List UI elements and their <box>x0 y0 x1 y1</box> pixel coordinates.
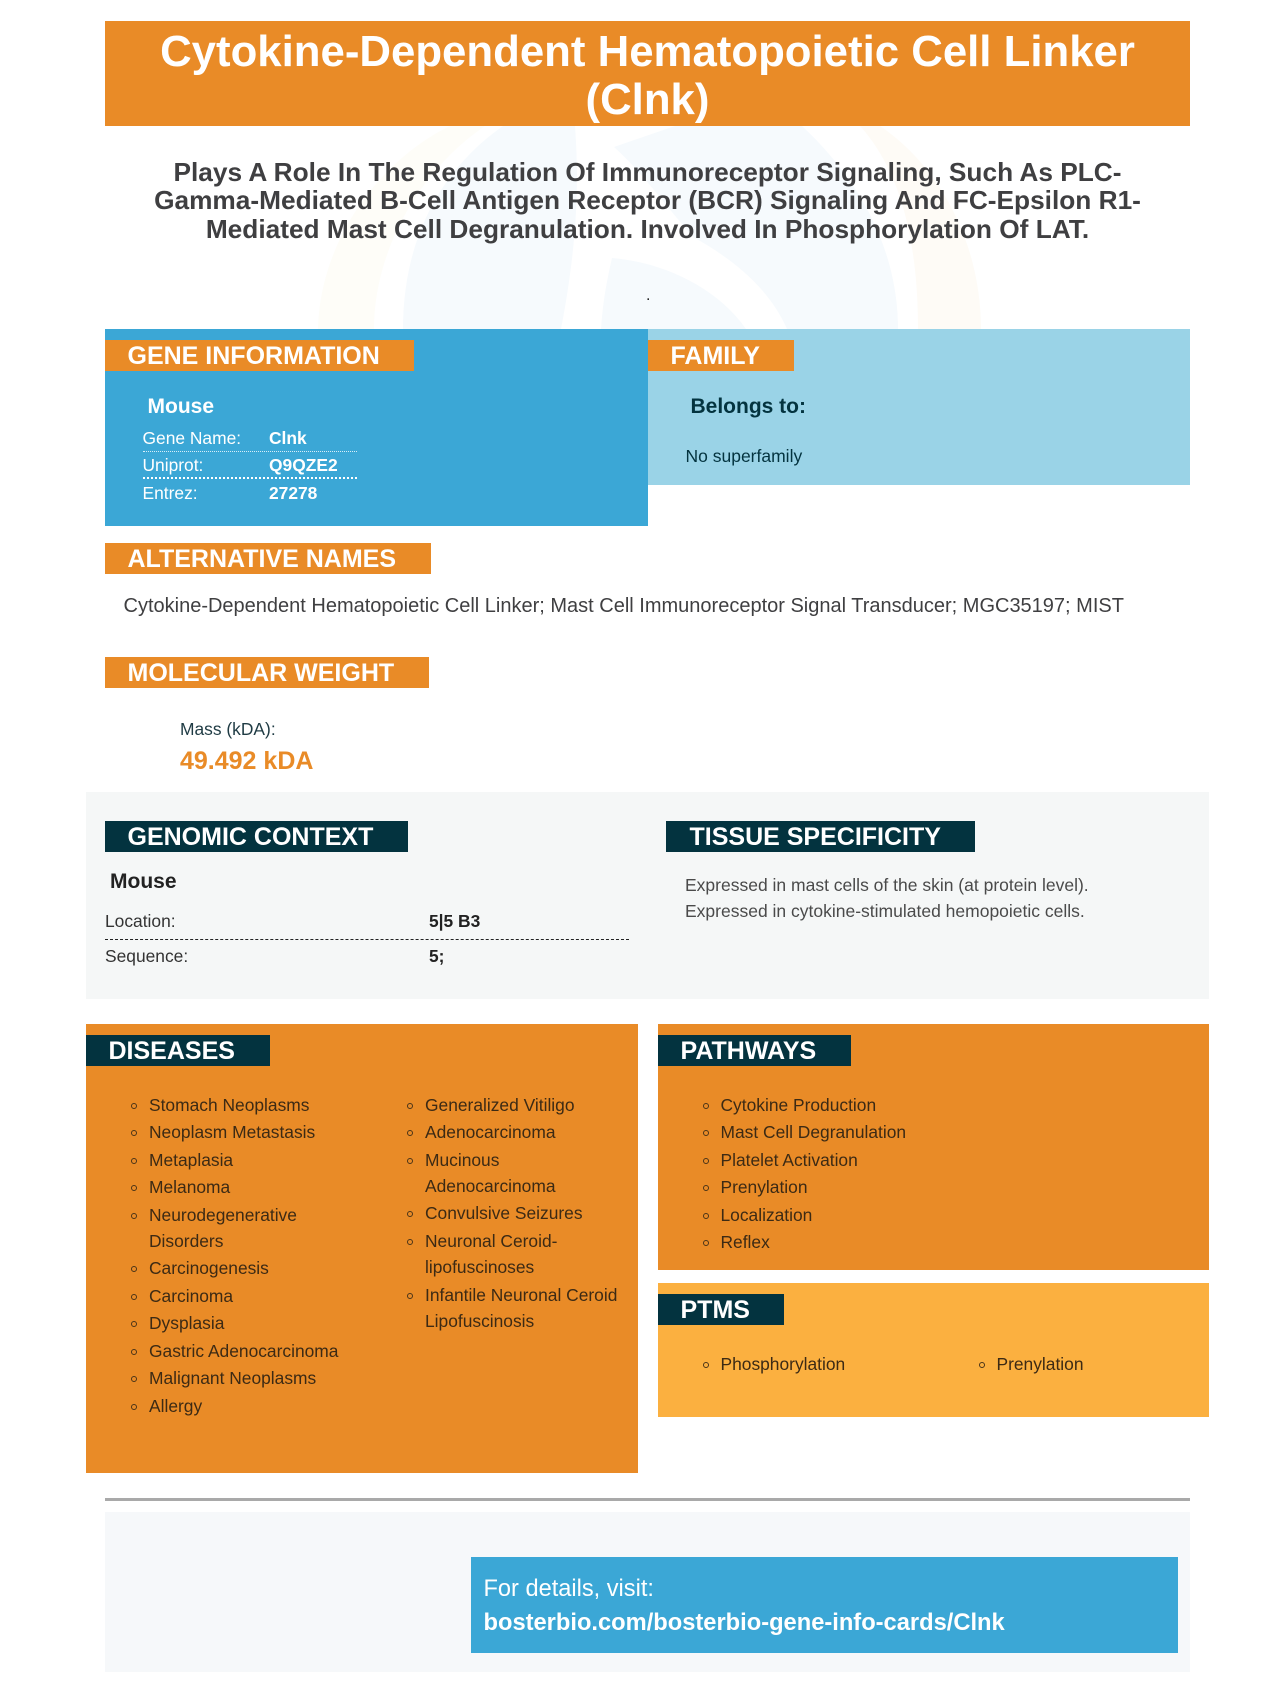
gene data table: 27278 <box>269 483 317 503</box>
ptm list <box>703 1354 1084 1374</box>
heading: family: FAMILY <box>670 342 760 370</box>
gene data table: Q9QZE2 <box>269 455 338 475</box>
disease list column two: Adenocarcinoma <box>425 1122 556 1142</box>
panel: footer <box>105 1512 1190 1672</box>
disease list column two: lipofuscinoses <box>425 1257 534 1277</box>
disease list column two: Mucinous <box>425 1150 499 1170</box>
pathway list: Mast Cell Degranulation <box>720 1122 906 1142</box>
genomic data table: Sequence: <box>105 946 188 966</box>
url: bosterbio.com/bosterbio-gene-info-cards/Clnk <box>484 1610 1005 1636</box>
gene data table: Uniprot: <box>142 455 203 475</box>
tissue specificity text <box>685 875 1089 921</box>
disease list column one <box>131 1095 338 1416</box>
disease list column one: Malignant Neoplasms <box>149 1368 316 1388</box>
panel: family <box>648 329 1190 485</box>
heading: pathways <box>658 1035 851 1066</box>
panel: pathways <box>658 1024 1209 1270</box>
disease list column two: Generalized Vitiligo <box>425 1095 575 1115</box>
disease list column two: Infantile Neuronal Ceroid <box>425 1285 617 1305</box>
panel: diseases <box>86 1024 638 1473</box>
title banner <box>105 21 1190 126</box>
genomic data table <box>105 911 629 966</box>
background watermark logo <box>403 126 981 329</box>
genomic data table: 5|5 B3 <box>429 911 480 931</box>
pathway list: Prenylation <box>720 1177 808 1197</box>
disease list column two: Convulsive Seizures <box>425 1203 583 1223</box>
title banner: (Clnk) <box>586 75 709 124</box>
subtitle description <box>154 156 1141 244</box>
disease list column two <box>407 1095 617 1331</box>
visit label: For details, visit: <box>484 1576 654 1602</box>
heading: tissue specificity: TISSUE SPECIFICITY <box>690 823 941 851</box>
heading: alternative names: ALTERNATIVE NAMES <box>128 545 396 573</box>
tissue specificity text: Expressed in mast cells of the skin (at protein level). <box>685 875 1089 895</box>
ptm list: Prenylation <box>996 1354 1084 1374</box>
disease list column two: Adenocarcinoma <box>425 1176 556 1196</box>
footer divider <box>105 1498 1190 1501</box>
disease list column one: Gastric Adenocarcinoma <box>149 1341 338 1361</box>
title banner: Cytokine-Dependent Hematopoietic Cell Linker <box>160 27 1135 76</box>
heading: molecular weight: MOLECULAR WEIGHT <box>128 659 394 687</box>
ptm list: Phosphorylation <box>720 1354 845 1374</box>
heading: gene information: GENE INFORMATION <box>128 342 380 370</box>
belongs to label: Belongs to: <box>690 395 806 418</box>
family value: No superfamily <box>686 446 802 466</box>
heading: diseases: DISEASES <box>108 1037 235 1065</box>
pathway list: Cytokine Production <box>720 1095 876 1115</box>
gene data table: Gene Name: <box>142 428 241 448</box>
disease list column one: Carcinogenesis <box>149 1258 269 1278</box>
disease list column one: Neurodegenerative <box>149 1205 297 1225</box>
disease list column one: Neoplasm Metastasis <box>149 1122 315 1142</box>
heading: pathways: PATHWAYS <box>680 1037 816 1065</box>
mass label: Mass (kDA): <box>180 719 276 739</box>
subtitle description: Gamma-Mediated B-Cell Antigen Receptor (BCR) Signaling And FC-Epsilon R1- <box>154 185 1141 215</box>
callout: details link <box>471 1557 1178 1653</box>
panel: ptms <box>658 1283 1209 1417</box>
genomic data table: 5; <box>429 946 444 966</box>
disease list column one: Allergy <box>149 1396 202 1416</box>
disease list column one: Dysplasia <box>149 1313 224 1333</box>
subtitle description: Mediated Mast Cell Degranulation. Involved In Phosphorylation Of LAT. <box>206 214 1089 244</box>
disease list column one: Disorders <box>149 1231 223 1251</box>
gene data table: Clnk <box>269 428 307 448</box>
genomic data table: Location: <box>105 911 176 931</box>
disease list column two: Neuronal Ceroid- <box>425 1231 557 1251</box>
mass value: 49.492 kDA <box>180 747 313 775</box>
heading: ptms: PTMS <box>680 1296 750 1324</box>
pathway list: Localization <box>720 1205 812 1225</box>
subtitle description: Plays A Role In The Regulation Of Immunoreceptor Signaling, Such As PLC- <box>173 156 1122 186</box>
heading: family <box>648 340 794 371</box>
disease list column one: Stomach Neoplasms <box>149 1095 309 1115</box>
disease list column one: Metaplasia <box>149 1150 233 1170</box>
species label: Mouse <box>148 395 214 418</box>
pathway list: Reflex <box>720 1232 770 1252</box>
panel: gene information <box>105 329 648 526</box>
species label: Mouse <box>110 870 177 893</box>
disease list column two: Lipofuscinosis <box>425 1311 534 1331</box>
alternative names text: Cytokine-Dependent Hematopoietic Cell Linker; Mast Cell Immunoreceptor Signal Transducer; MGC35197; MIST <box>124 595 1124 617</box>
small dot text: . <box>646 287 650 304</box>
gene data table: Entrez: <box>142 483 198 503</box>
heading: genomic context: GENOMIC CONTEXT <box>128 823 373 851</box>
disease list column one: Melanoma <box>149 1177 230 1197</box>
pathway list <box>703 1095 906 1252</box>
tissue specificity text: Expressed in cytokine-stimulated hemopoietic cells. <box>685 901 1085 921</box>
heading: diseases <box>86 1035 270 1066</box>
panel: genomic context and tissue specificity <box>86 792 1209 999</box>
gene data table <box>142 428 357 503</box>
heading: ptms <box>658 1294 784 1325</box>
disease list column one: Carcinoma <box>149 1286 233 1306</box>
pathway list: Platelet Activation <box>720 1150 858 1170</box>
